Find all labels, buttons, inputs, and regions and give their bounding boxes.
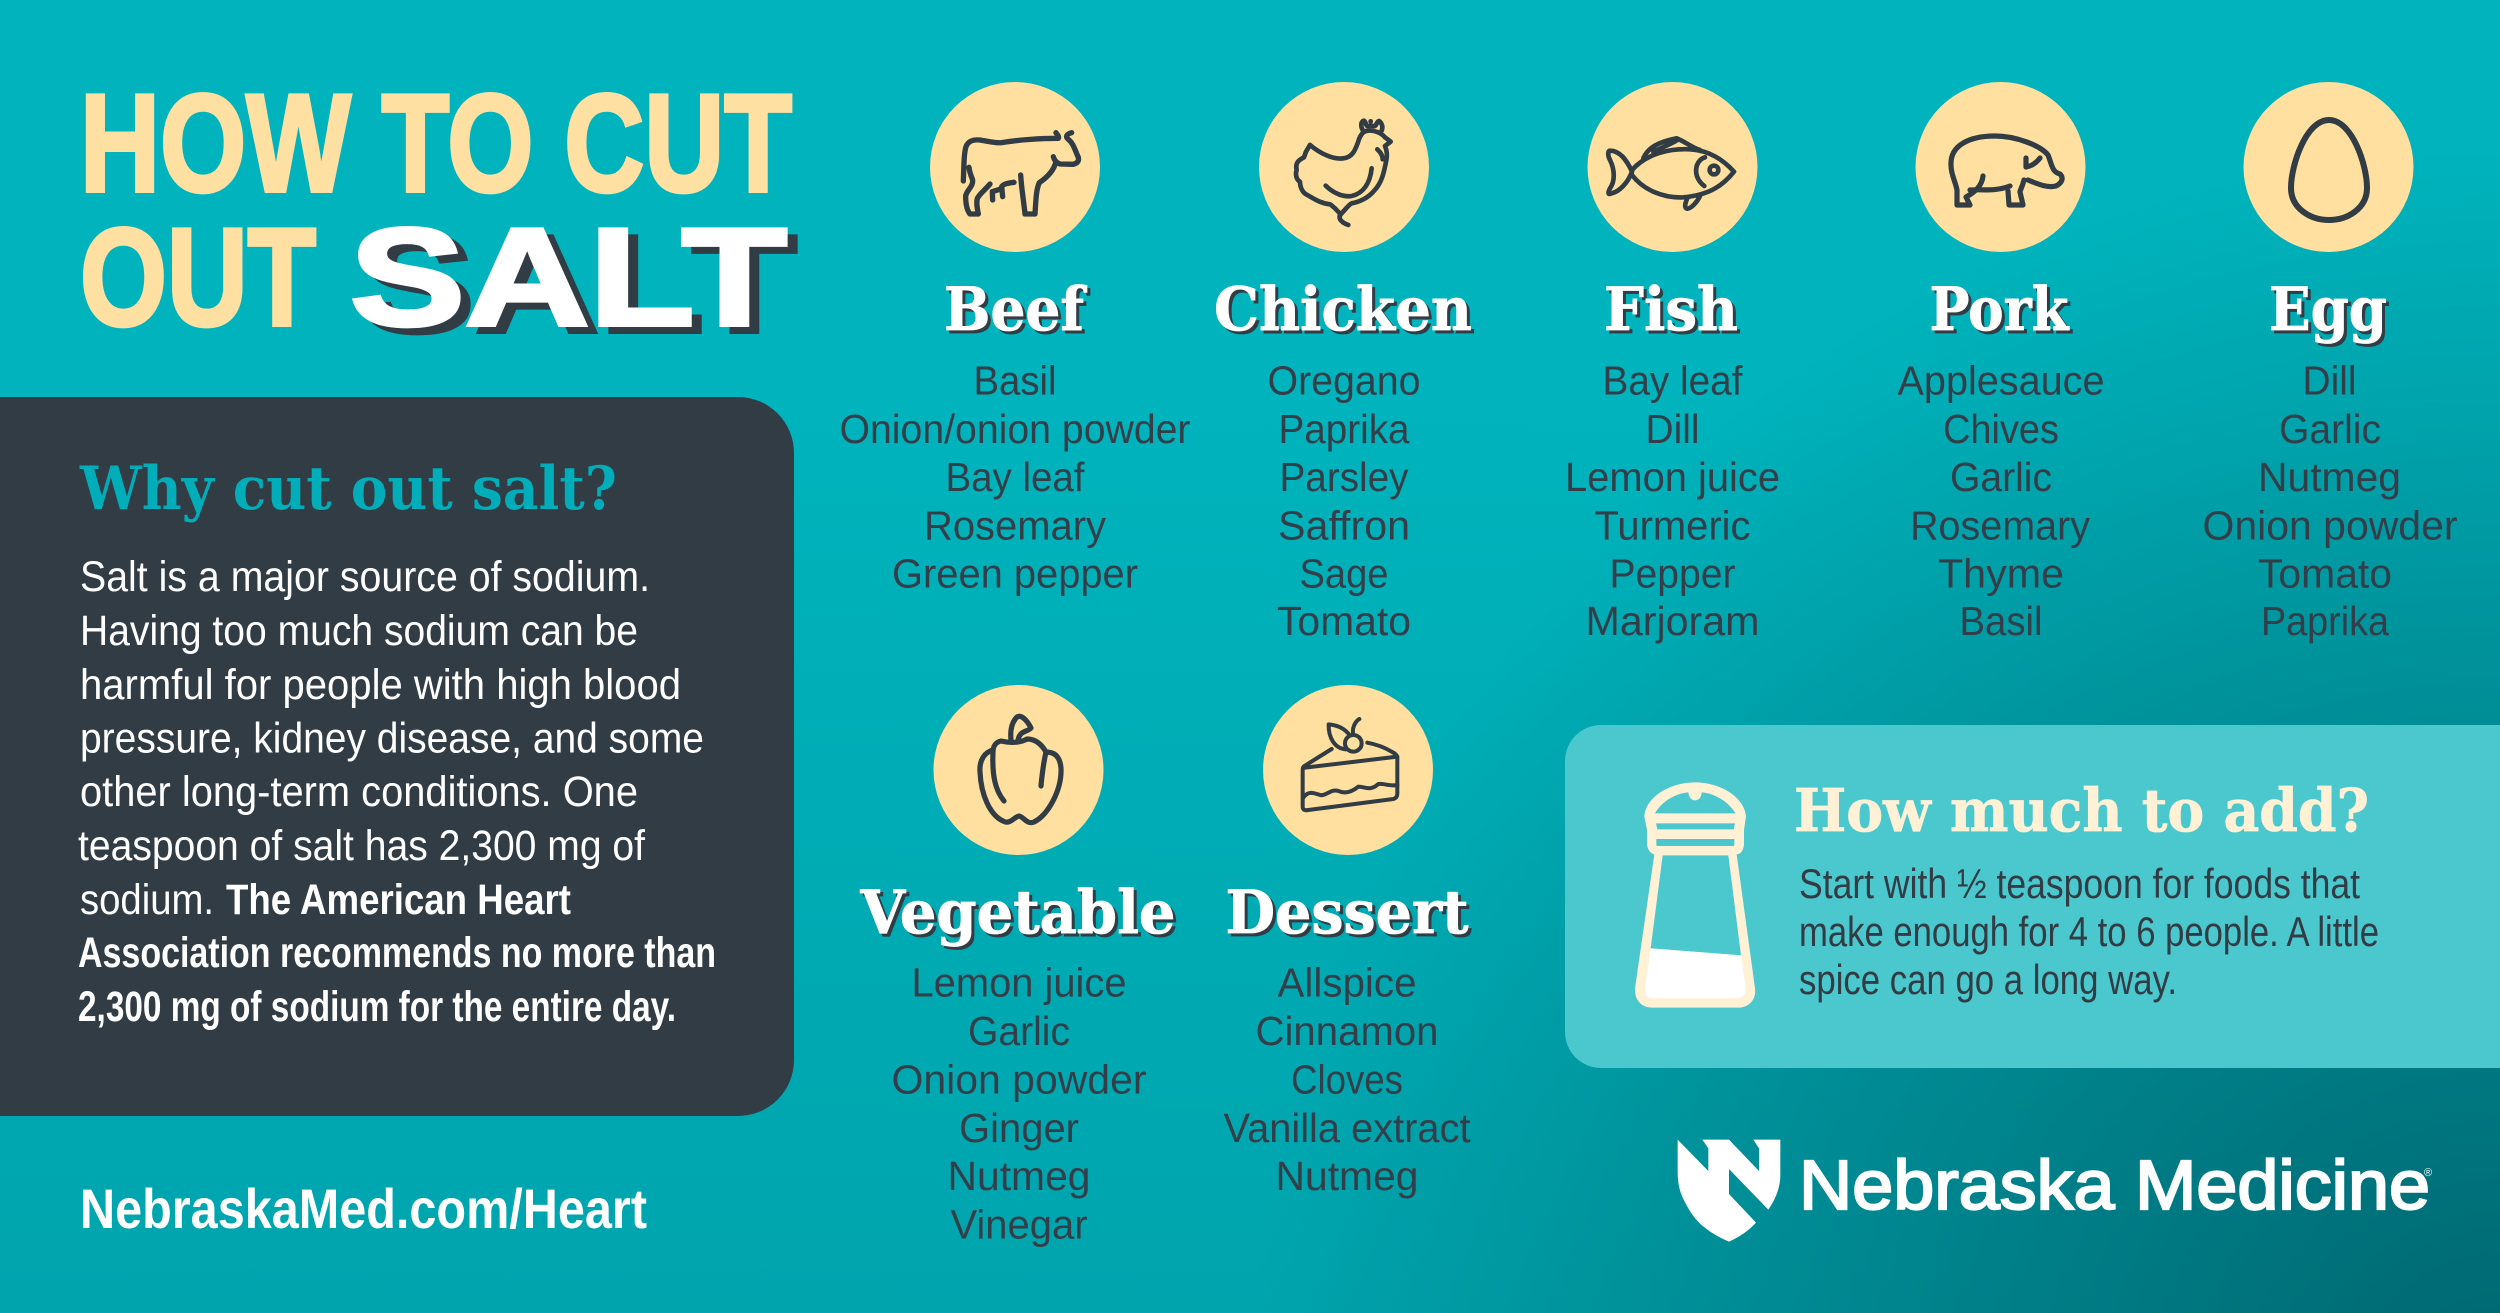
list: dessert spices: Cinnamon <box>1256 1008 1438 1054</box>
body text: harmful for people with high blood <box>80 661 681 709</box>
body text: The American Heart <box>226 876 571 924</box>
list: vegetable spices: Ginger <box>959 1105 1079 1151</box>
list: egg spices: Paprika <box>2261 598 2389 644</box>
heading: why cut out salt: Why cut out salt? <box>79 454 617 524</box>
icon: fish <box>1588 82 1758 252</box>
list: vegetable spices: Lemon juice <box>912 960 1126 1006</box>
title <box>80 66 792 355</box>
list: beef spices: Onion/onion powder <box>840 406 1190 452</box>
list: vegetable spices <box>892 960 1146 1248</box>
list: pork spices: Basil <box>1960 598 2042 644</box>
list: pork spices: Applesauce <box>1898 358 2104 404</box>
list: fish spices: Turmeric <box>1594 502 1750 548</box>
column: beef <box>840 82 1190 596</box>
list: egg spices: Garlic <box>2279 406 2381 452</box>
column: pork <box>1898 82 2104 644</box>
list: beef spices: Green pepper <box>892 550 1138 596</box>
wordmark: Nebraska Medicine <box>1799 1146 2430 1224</box>
body text: sodium. <box>80 876 214 924</box>
body text: Association recommends no more than <box>78 929 716 977</box>
icon: pig <box>1916 82 2086 252</box>
list: beef spices: Rosemary <box>924 502 1106 548</box>
list: pork spices: Garlic <box>1950 454 2052 500</box>
heading: dessert: Dessert <box>1226 878 1469 948</box>
body text <box>1799 860 2379 1003</box>
icon: cake slice <box>1263 685 1433 855</box>
list: fish spices: Pepper <box>1610 550 1736 596</box>
list: vegetable spices: Vinegar <box>950 1202 1088 1248</box>
website url: NebraskaMed.com/Heart <box>80 1177 647 1240</box>
body text: pressure, kidney disease, and some <box>80 714 704 762</box>
list: fish spices: Marjoram <box>1586 598 1760 644</box>
list: dessert spices: Cloves <box>1291 1057 1403 1103</box>
list: pork spices: Thyme <box>1938 550 2064 596</box>
column: dessert <box>1224 685 1471 1199</box>
column: fish <box>1565 82 1780 644</box>
column: chicken <box>1214 82 1472 644</box>
list: chicken spices: Paprika <box>1278 406 1410 452</box>
column: vegetable <box>860 685 1176 1248</box>
body text: other long-term conditions. One <box>80 768 638 816</box>
list: egg spices: Nutmeg <box>2258 454 2401 500</box>
list: chicken spices: Saffron <box>1278 502 1410 548</box>
list: chicken spices: Parsley <box>1280 454 1409 500</box>
list: pork spices <box>1898 358 2104 644</box>
list: beef spices: Basil <box>974 358 1056 404</box>
list: fish spices: Dill <box>1646 406 1700 452</box>
list: vegetable spices: Garlic <box>968 1008 1070 1054</box>
icon: shield <box>1678 1140 1780 1242</box>
logo: Nebraska Medicine <box>1678 1140 2432 1242</box>
title: HOW TO CUT <box>80 66 792 221</box>
list: chicken spices: Sage <box>1300 550 1388 596</box>
list: dessert spices: Vanilla extract <box>1224 1105 1471 1151</box>
icon: bell pepper <box>934 685 1104 855</box>
body text: spice can go a long way. <box>1799 956 2177 1003</box>
column: egg <box>2202 82 2458 644</box>
list: dessert spices: Allspice <box>1278 960 1416 1006</box>
list: egg spices: Tomato <box>2258 550 2392 596</box>
heading: egg: Egg <box>2269 275 2387 345</box>
list: egg spices: Dill <box>2302 358 2356 404</box>
list: beef spices: Bay leaf <box>946 454 1085 500</box>
panel: why cut out salt <box>0 397 794 1116</box>
list: pork spices: Chives <box>1943 406 2059 452</box>
body text: 2,300 mg of sodium for the entire day. <box>78 983 676 1031</box>
list: chicken spices: Oregano <box>1268 358 1420 404</box>
heading: how much to add: How much to add? <box>1794 776 2369 845</box>
icon: chicken <box>1259 82 1429 252</box>
icon: egg <box>2244 82 2414 252</box>
heading: chicken: Chicken <box>1214 275 1472 345</box>
wordmark: ® <box>2424 1167 2432 1179</box>
heading: pork: Pork <box>1930 275 2070 345</box>
body text <box>78 553 716 1031</box>
title: SALT <box>350 200 787 355</box>
list: dessert spices <box>1224 960 1471 1199</box>
icon: salt shaker <box>1635 782 1755 1008</box>
heading: vegetable: Vegetable <box>860 878 1176 948</box>
body text: teaspoon of salt has 2,300 mg of <box>78 822 646 870</box>
panel: how much to add <box>1565 725 2500 1068</box>
body text: Start with ½ teaspoon for foods that <box>1799 860 2360 907</box>
body text: Having too much sodium can be <box>80 607 638 655</box>
list: egg spices <box>2202 358 2458 644</box>
list: beef spices <box>840 358 1190 596</box>
list: pork spices: Rosemary <box>1910 502 2090 548</box>
heading: beef: Beef <box>944 275 1088 345</box>
body text: make enough for 4 to 6 people. A little <box>1799 908 2379 955</box>
list: dessert spices: Nutmeg <box>1276 1153 1418 1199</box>
icon: cow <box>930 82 1100 252</box>
list: fish spices: Bay leaf <box>1602 358 1743 404</box>
list: fish spices <box>1565 358 1780 644</box>
heading: fish: Fish <box>1604 275 1738 345</box>
list: egg spices: Onion powder <box>2202 502 2458 548</box>
list: fish spices: Lemon juice <box>1565 454 1780 500</box>
body text: Salt is a major source of sodium. <box>80 553 650 601</box>
list: vegetable spices: Onion powder <box>892 1057 1146 1103</box>
title: OUT <box>80 200 316 355</box>
list: vegetable spices: Nutmeg <box>948 1153 1090 1199</box>
list: chicken spices <box>1268 358 1420 644</box>
list: chicken spices: Tomato <box>1277 598 1411 644</box>
